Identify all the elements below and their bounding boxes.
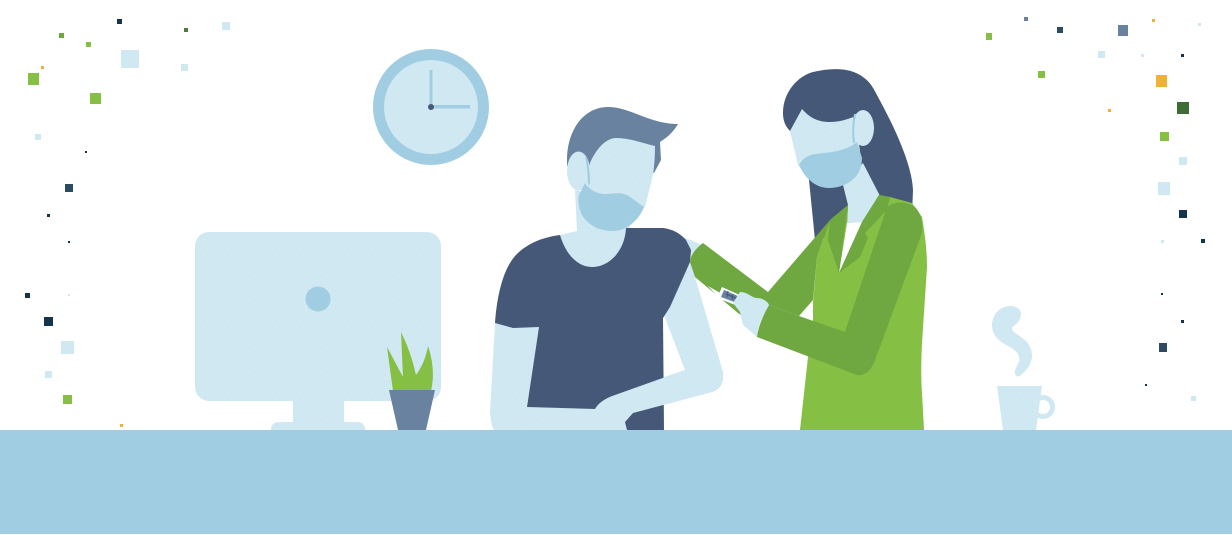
man's ear shadow line [585, 157, 590, 185]
man patient [490, 107, 723, 430]
man's shoulder [670, 232, 705, 262]
woman's face mask [799, 142, 862, 188]
woman's neck [843, 163, 880, 225]
wall clock [378, 54, 484, 160]
woman's right sleeve [757, 202, 922, 375]
computer monitor [195, 232, 441, 430]
man's face [585, 138, 655, 231]
man's face mask [578, 183, 644, 231]
woman's hair [783, 69, 913, 240]
woman's jacket body [800, 195, 927, 430]
jacket lapels [828, 195, 890, 273]
woman's face [790, 109, 860, 182]
left confetti squares [25, 19, 230, 427]
woman's ear [852, 110, 874, 146]
woman's left sleeve [690, 220, 830, 318]
syringe [708, 286, 746, 306]
man's hair [567, 107, 678, 173]
man's t-shirt [495, 228, 691, 430]
man's arms [490, 260, 723, 430]
man's forearm [585, 370, 712, 430]
woman's ear shadow line [852, 114, 856, 143]
coffee cup with steam [992, 306, 1052, 430]
right confetti squares [986, 17, 1205, 401]
desk [0, 430, 1232, 534]
potted plant [387, 332, 435, 430]
man's neck [556, 190, 630, 272]
woman's hand [733, 292, 769, 337]
white undershirt [839, 222, 862, 273]
woman nurse [690, 69, 927, 430]
man's ear [567, 152, 590, 190]
